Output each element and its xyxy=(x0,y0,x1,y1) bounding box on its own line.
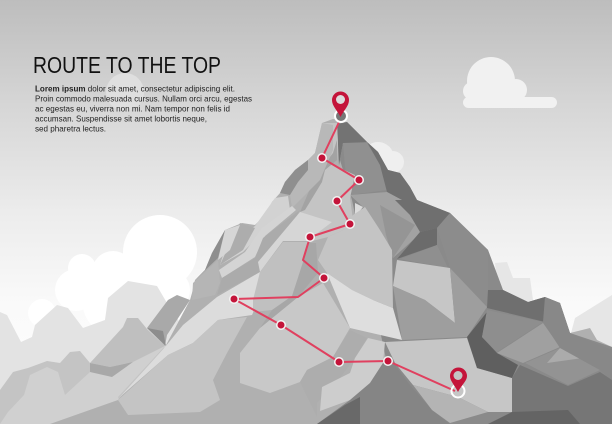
central light panel xyxy=(318,207,393,308)
foot right light panel xyxy=(385,338,512,412)
lower bright panel xyxy=(327,273,402,340)
lower right face xyxy=(350,192,422,258)
route line xyxy=(234,118,455,391)
cloud: behind peak xyxy=(362,142,404,174)
background mountains right xyxy=(495,262,612,350)
lower centre facets xyxy=(300,330,367,417)
waypoints xyxy=(229,153,393,367)
peak shadow xyxy=(337,122,367,165)
cloud: top right xyxy=(463,57,557,108)
left lower facet xyxy=(118,317,247,415)
right main face xyxy=(343,143,387,195)
body text: Lorem ipsum dolor sit amet, consectetur adipiscing elit. xyxy=(35,84,235,94)
ridge second light strip xyxy=(219,206,296,278)
cloud: behind title xyxy=(106,73,144,111)
ridge grey strip xyxy=(220,223,255,265)
main mountain xyxy=(50,119,612,424)
mountain silhouette xyxy=(50,119,612,424)
pin: start xyxy=(450,368,467,398)
ridge lower column xyxy=(192,260,220,300)
upper left facets xyxy=(300,123,355,242)
upper mid facet xyxy=(253,242,315,312)
left lower bright strip xyxy=(120,272,260,397)
ridge light area xyxy=(258,212,332,272)
ridge light strip xyxy=(220,196,290,265)
pin: summit xyxy=(332,92,349,122)
body text xyxy=(35,84,252,134)
ridge small light facet xyxy=(218,225,240,260)
body text: Proin commodo malesuada cursus. Nullam orci arcu, egestas xyxy=(35,94,252,104)
dark crevice xyxy=(467,312,518,378)
background mountains left xyxy=(0,281,190,424)
ridge grey band xyxy=(217,210,300,295)
right mid facet xyxy=(393,268,487,340)
right edge shadow xyxy=(367,142,417,207)
shaded band xyxy=(260,243,318,328)
title: ROUTE TO THE TOP xyxy=(33,52,221,78)
centre light facet xyxy=(240,283,350,393)
body text: sed pharetra lectus. xyxy=(35,124,106,134)
cloud: large left xyxy=(28,215,197,338)
right light facet xyxy=(393,260,455,323)
right lower facets xyxy=(487,290,545,322)
body text: accumsan. Suspendisse sit amet lobortis neque, xyxy=(35,114,207,124)
body text: ac egestas eu, viverra non mi. Nam tempor non felis id xyxy=(35,104,230,114)
right dark face xyxy=(340,122,612,424)
ridge left dark edge xyxy=(195,230,225,280)
ridge dark strip xyxy=(280,160,308,195)
